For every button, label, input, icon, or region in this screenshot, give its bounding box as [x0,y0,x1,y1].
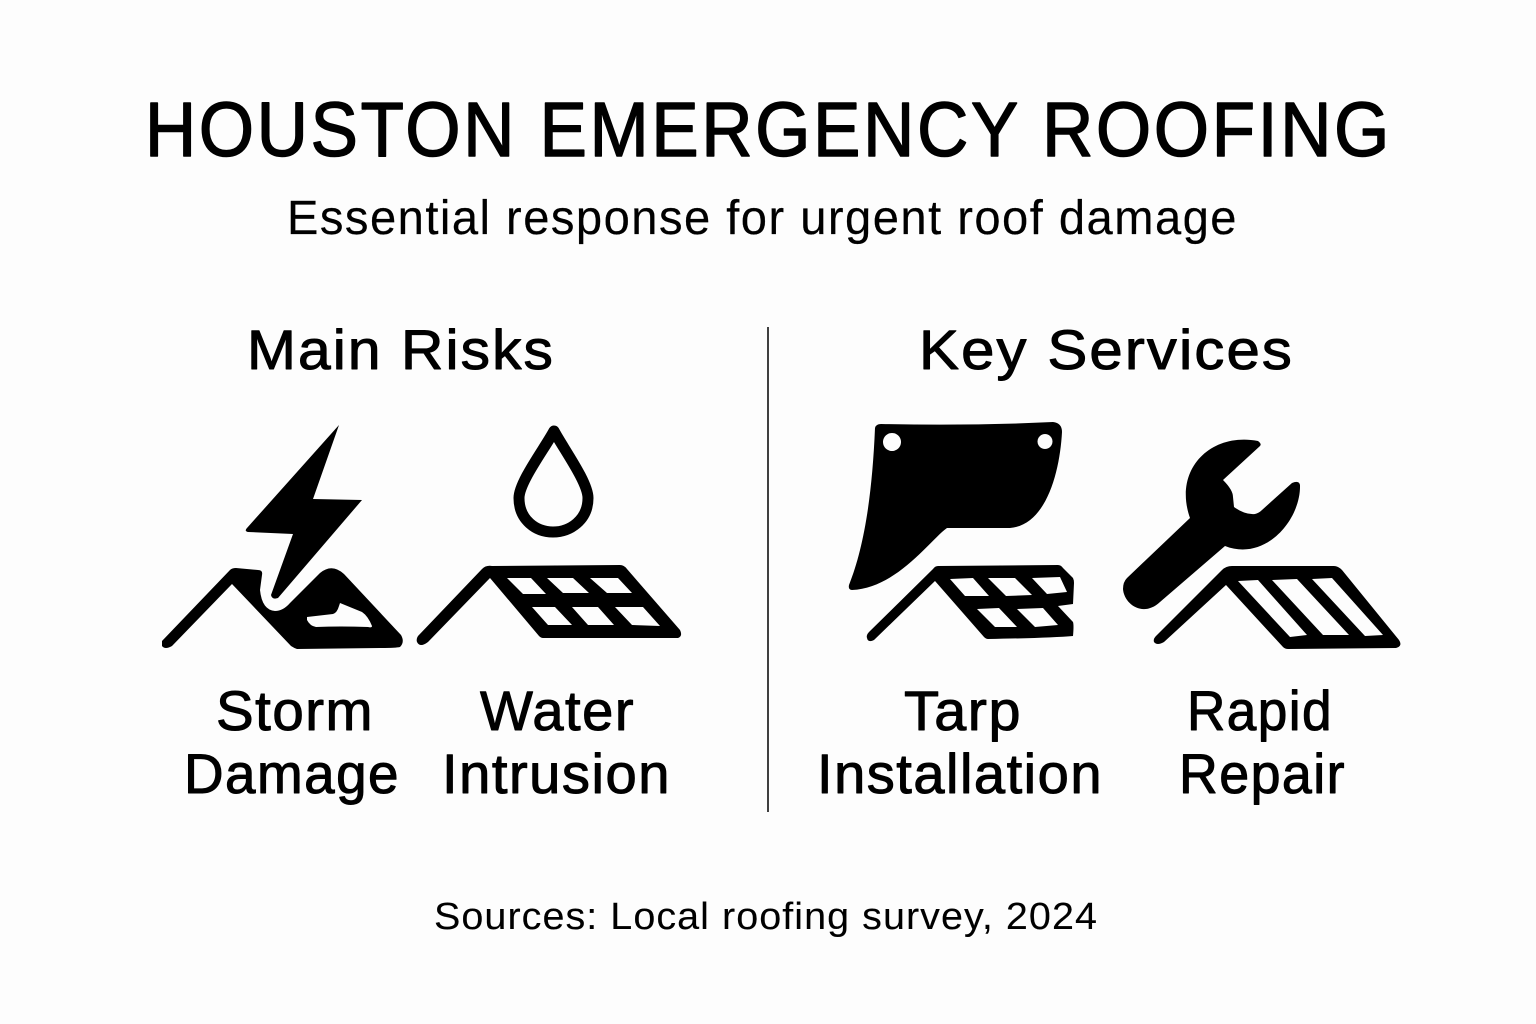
label: water intrusion: Water [480,679,635,742]
heading: key services: Key Services [919,318,1294,381]
label: water intrusion: Intrusion [442,742,671,805]
label: water intrusion [442,679,671,805]
label: storm damage: Storm [216,679,374,742]
label: storm damage [184,679,400,805]
divider between panels [767,327,769,812]
label: rapid repair: Rapid [1187,679,1333,742]
label: tarp installation: Installation [817,742,1103,805]
label: tarp installation: Tarp [904,679,1022,742]
icon: tarp installation [849,422,1074,641]
icon: rapid repair [1123,440,1400,649]
icon: storm damage [162,425,403,649]
source note: Sources: Local roofing survey, 2024 [434,896,1098,938]
heading: main risks: Main Risks [247,318,555,381]
subtitle: Essential response for urgent roof damage [287,192,1238,245]
label: rapid repair: Repair [1179,742,1346,805]
label: tarp installation [817,679,1103,805]
title: HOUSTON EMERGENCY ROOFING [145,87,1392,173]
label: storm damage: Damage [184,742,400,805]
label: rapid repair [1179,679,1346,805]
icon: water intrusion [417,431,681,645]
